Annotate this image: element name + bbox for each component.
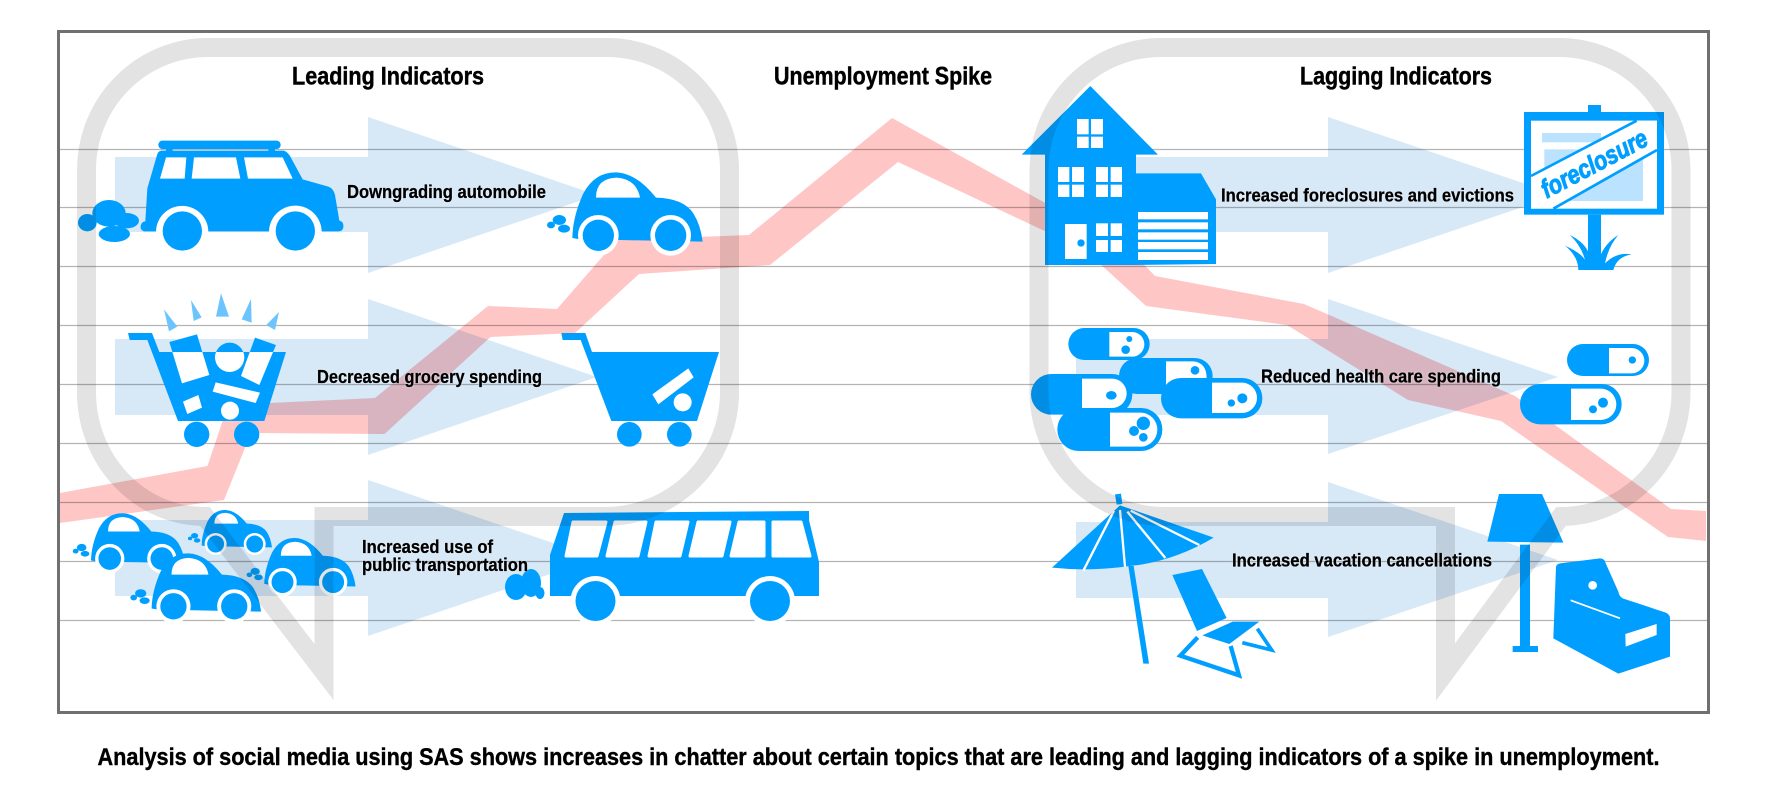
icon: group of cars [73, 510, 356, 623]
label: downgrading automobile: Downgrading automobile [347, 181, 546, 202]
speech bubble: lagging indicators [1039, 48, 1681, 672]
icon: large SUV with exhaust [78, 141, 343, 251]
icon: small car [547, 172, 703, 256]
unemployment trend line [60, 118, 1706, 541]
label: reduced health care spending: Reduced health care spending [1261, 366, 1501, 386]
icon: foreclosure sign: foreclosure [1535, 123, 1653, 204]
arrow: decreased grocery spending [115, 299, 597, 455]
icon: bus [505, 511, 819, 626]
icon: beach umbrella and lounge chair [1052, 494, 1272, 675]
icon: floor lamp and armchair [1487, 494, 1670, 674]
heading: leading indicators: Leading Indicators [292, 62, 484, 90]
heading: lagging indicators: Lagging Indicators [1300, 62, 1492, 90]
icon: full shopping cart [128, 293, 286, 447]
label: decreased grocery spending: Decreased grocery spending [317, 366, 542, 387]
label: increased use of public transportation: Increased use of [362, 536, 494, 557]
icon: pile of pills [1031, 328, 1262, 451]
label: increased use of public transportation: public transportation [362, 554, 528, 575]
icon: nearly empty shopping cart [561, 333, 719, 447]
chart frame [58, 32, 1708, 712]
icon: foreclosure sign [1524, 105, 1664, 270]
label: increased use of public transportation [362, 536, 528, 575]
arrow: increased public transportation [115, 480, 597, 636]
arrow: increased foreclosures [1076, 117, 1558, 273]
arrow: reduced health care spending [1076, 299, 1558, 454]
speech bubble: leading indicators [86, 48, 730, 672]
label: increased vacation cancellations: Increased vacation cancellations [1232, 550, 1492, 570]
icon: house with garage [1022, 86, 1216, 265]
heading: unemployment spike: Unemployment Spike [774, 62, 992, 90]
label: increased foreclosures and evictions: Increased foreclosures and evictions [1221, 184, 1514, 206]
arrow: increased vacation cancellations [1076, 482, 1558, 637]
arrow: downgrading automobile [115, 117, 597, 273]
icon: two pills [1520, 344, 1649, 424]
